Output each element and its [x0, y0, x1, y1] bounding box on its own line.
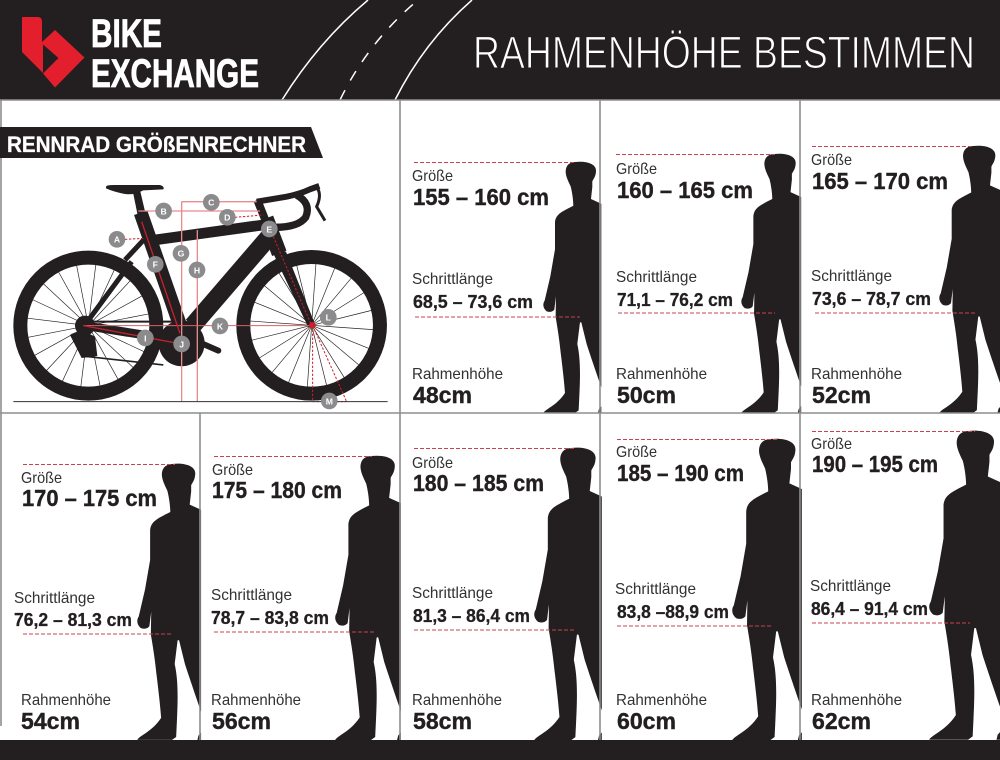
labels A to M: J — [179, 339, 184, 349]
frame size: 48cm — [413, 382, 472, 408]
inseam: Schrittlänge — [412, 585, 493, 602]
frame size — [616, 692, 707, 734]
inseam: Schrittlänge — [811, 268, 892, 285]
front wheel — [243, 257, 380, 394]
height: Größe — [412, 168, 453, 185]
silhouette — [137, 464, 201, 740]
labels A to M: L — [326, 313, 332, 323]
inseam — [211, 587, 329, 628]
frame size: 62cm — [812, 708, 871, 734]
inseam — [14, 590, 132, 630]
frame size — [21, 692, 111, 734]
inseam: Schrittlänge — [211, 587, 292, 604]
inseam: 86,4 – 91,4 cm — [811, 599, 928, 619]
height: Größe — [412, 455, 453, 472]
logo wordmark: BIKE — [91, 12, 162, 56]
height — [412, 168, 549, 210]
silhouette — [335, 456, 401, 740]
inseam: 71,1 – 76,2 cm — [617, 290, 733, 310]
height — [412, 455, 544, 496]
frame — [70, 185, 325, 366]
labels A to M: A — [114, 235, 121, 245]
height: Größe — [811, 152, 852, 169]
height: Größe — [21, 470, 62, 487]
frame size: Rahmenhöhe — [616, 692, 707, 709]
labels A to M: G — [178, 249, 185, 259]
frame size: 56cm — [212, 708, 271, 734]
labels A to M: H — [194, 265, 200, 275]
height: 185 – 190 cm — [617, 460, 744, 486]
panel: 54cm — [14, 464, 201, 740]
panel: bike size calculator — [0, 127, 388, 409]
panel: 58cm — [412, 448, 602, 740]
road lines — [282, 0, 472, 100]
inseam: 73,6 – 78,7 cm — [812, 289, 931, 309]
height: Größe — [811, 436, 852, 453]
inseam: Schrittlänge — [810, 578, 891, 595]
inseam: Schrittlänge — [615, 581, 696, 598]
inseam: 78,7 – 83,8 cm — [211, 608, 329, 628]
ground line — [13, 400, 388, 403]
silhouette — [939, 146, 1000, 413]
height: Größe — [616, 161, 657, 178]
inseam: 68,5 – 73,6 cm — [413, 292, 533, 312]
frame size: Rahmenhöhe — [811, 366, 902, 383]
frame size: 52cm — [812, 382, 871, 408]
labels A to M: B — [161, 206, 167, 216]
frame size — [811, 692, 902, 734]
panel: 48cm — [412, 162, 601, 413]
labels A to M — [109, 194, 338, 409]
labels A to M: F — [153, 260, 158, 270]
height: Größe — [616, 444, 657, 461]
labels A to M: C — [208, 198, 215, 208]
height: 170 – 175 cm — [22, 485, 157, 511]
rear wheel — [20, 258, 156, 394]
frame size — [616, 366, 707, 408]
inseam: 83,8 –88,9 cm — [617, 602, 729, 622]
header band — [0, 0, 1000, 100]
inseam — [810, 578, 928, 619]
logo wordmark — [91, 12, 259, 96]
bike diagram — [13, 185, 388, 409]
frame size: 50cm — [617, 382, 676, 408]
silhouette — [732, 439, 802, 740]
frame size: Rahmenhöhe — [412, 366, 503, 383]
frame size: 58cm — [413, 708, 472, 734]
labels A to M: I — [144, 333, 147, 343]
inseam: Schrittlänge — [616, 269, 697, 286]
height — [811, 436, 938, 477]
panel: 62cm — [810, 431, 1000, 740]
frame size: Rahmenhöhe — [811, 692, 902, 709]
panel: 50cm — [616, 154, 801, 413]
silhouette — [543, 162, 601, 413]
panel: 52cm — [811, 146, 1000, 413]
height — [616, 444, 744, 486]
height: 165 – 170 cm — [812, 168, 948, 194]
labels A to M: D — [224, 213, 230, 223]
labels A to M: E — [266, 224, 272, 234]
silhouette — [741, 154, 801, 413]
height: 180 – 185 cm — [413, 470, 544, 496]
inseam: Schrittlänge — [412, 271, 493, 288]
frame size: Rahmenhöhe — [616, 366, 707, 383]
inseam: Schrittlänge — [14, 590, 95, 607]
labels A to M: M — [326, 396, 333, 406]
frame size — [211, 692, 301, 734]
logo wordmark: EXCHANGE — [91, 52, 259, 96]
inseam — [412, 585, 530, 626]
inseam — [616, 269, 733, 310]
height: 160 – 165 cm — [617, 177, 753, 203]
frame size: Rahmenhöhe — [412, 692, 502, 709]
height — [212, 462, 342, 503]
frame size: Rahmenhöhe — [21, 692, 111, 709]
frame size — [412, 366, 503, 408]
height — [616, 161, 753, 203]
labels A to M: K — [217, 321, 224, 331]
height: 155 – 160 cm — [413, 184, 549, 210]
height — [21, 470, 157, 511]
frame size: 54cm — [21, 708, 80, 734]
height: 190 – 195 cm — [812, 451, 938, 477]
height — [811, 152, 948, 194]
height: 175 – 180 cm — [212, 477, 342, 503]
frame size: Rahmenhöhe — [211, 692, 301, 709]
logo — [22, 12, 259, 96]
height: Größe — [212, 462, 253, 479]
footer band — [0, 740, 1000, 760]
silhouette — [929, 431, 1000, 740]
inseam: 81,3 – 86,4 cm — [413, 606, 530, 626]
heading banner: RENNRAD GRÖßENRECHNER — [7, 132, 306, 157]
frame size — [811, 366, 902, 408]
inseam — [811, 268, 931, 309]
inseam — [412, 271, 533, 312]
inseam — [615, 581, 729, 622]
silhouette — [534, 448, 602, 740]
measurement lines — [83, 202, 347, 402]
inseam: 76,2 – 81,3 cm — [14, 610, 132, 630]
frame size: 60cm — [617, 708, 676, 734]
panel: 60cm — [615, 439, 802, 740]
logo mark — [22, 17, 84, 88]
frame size — [412, 692, 502, 734]
panel: 56cm — [211, 456, 401, 740]
